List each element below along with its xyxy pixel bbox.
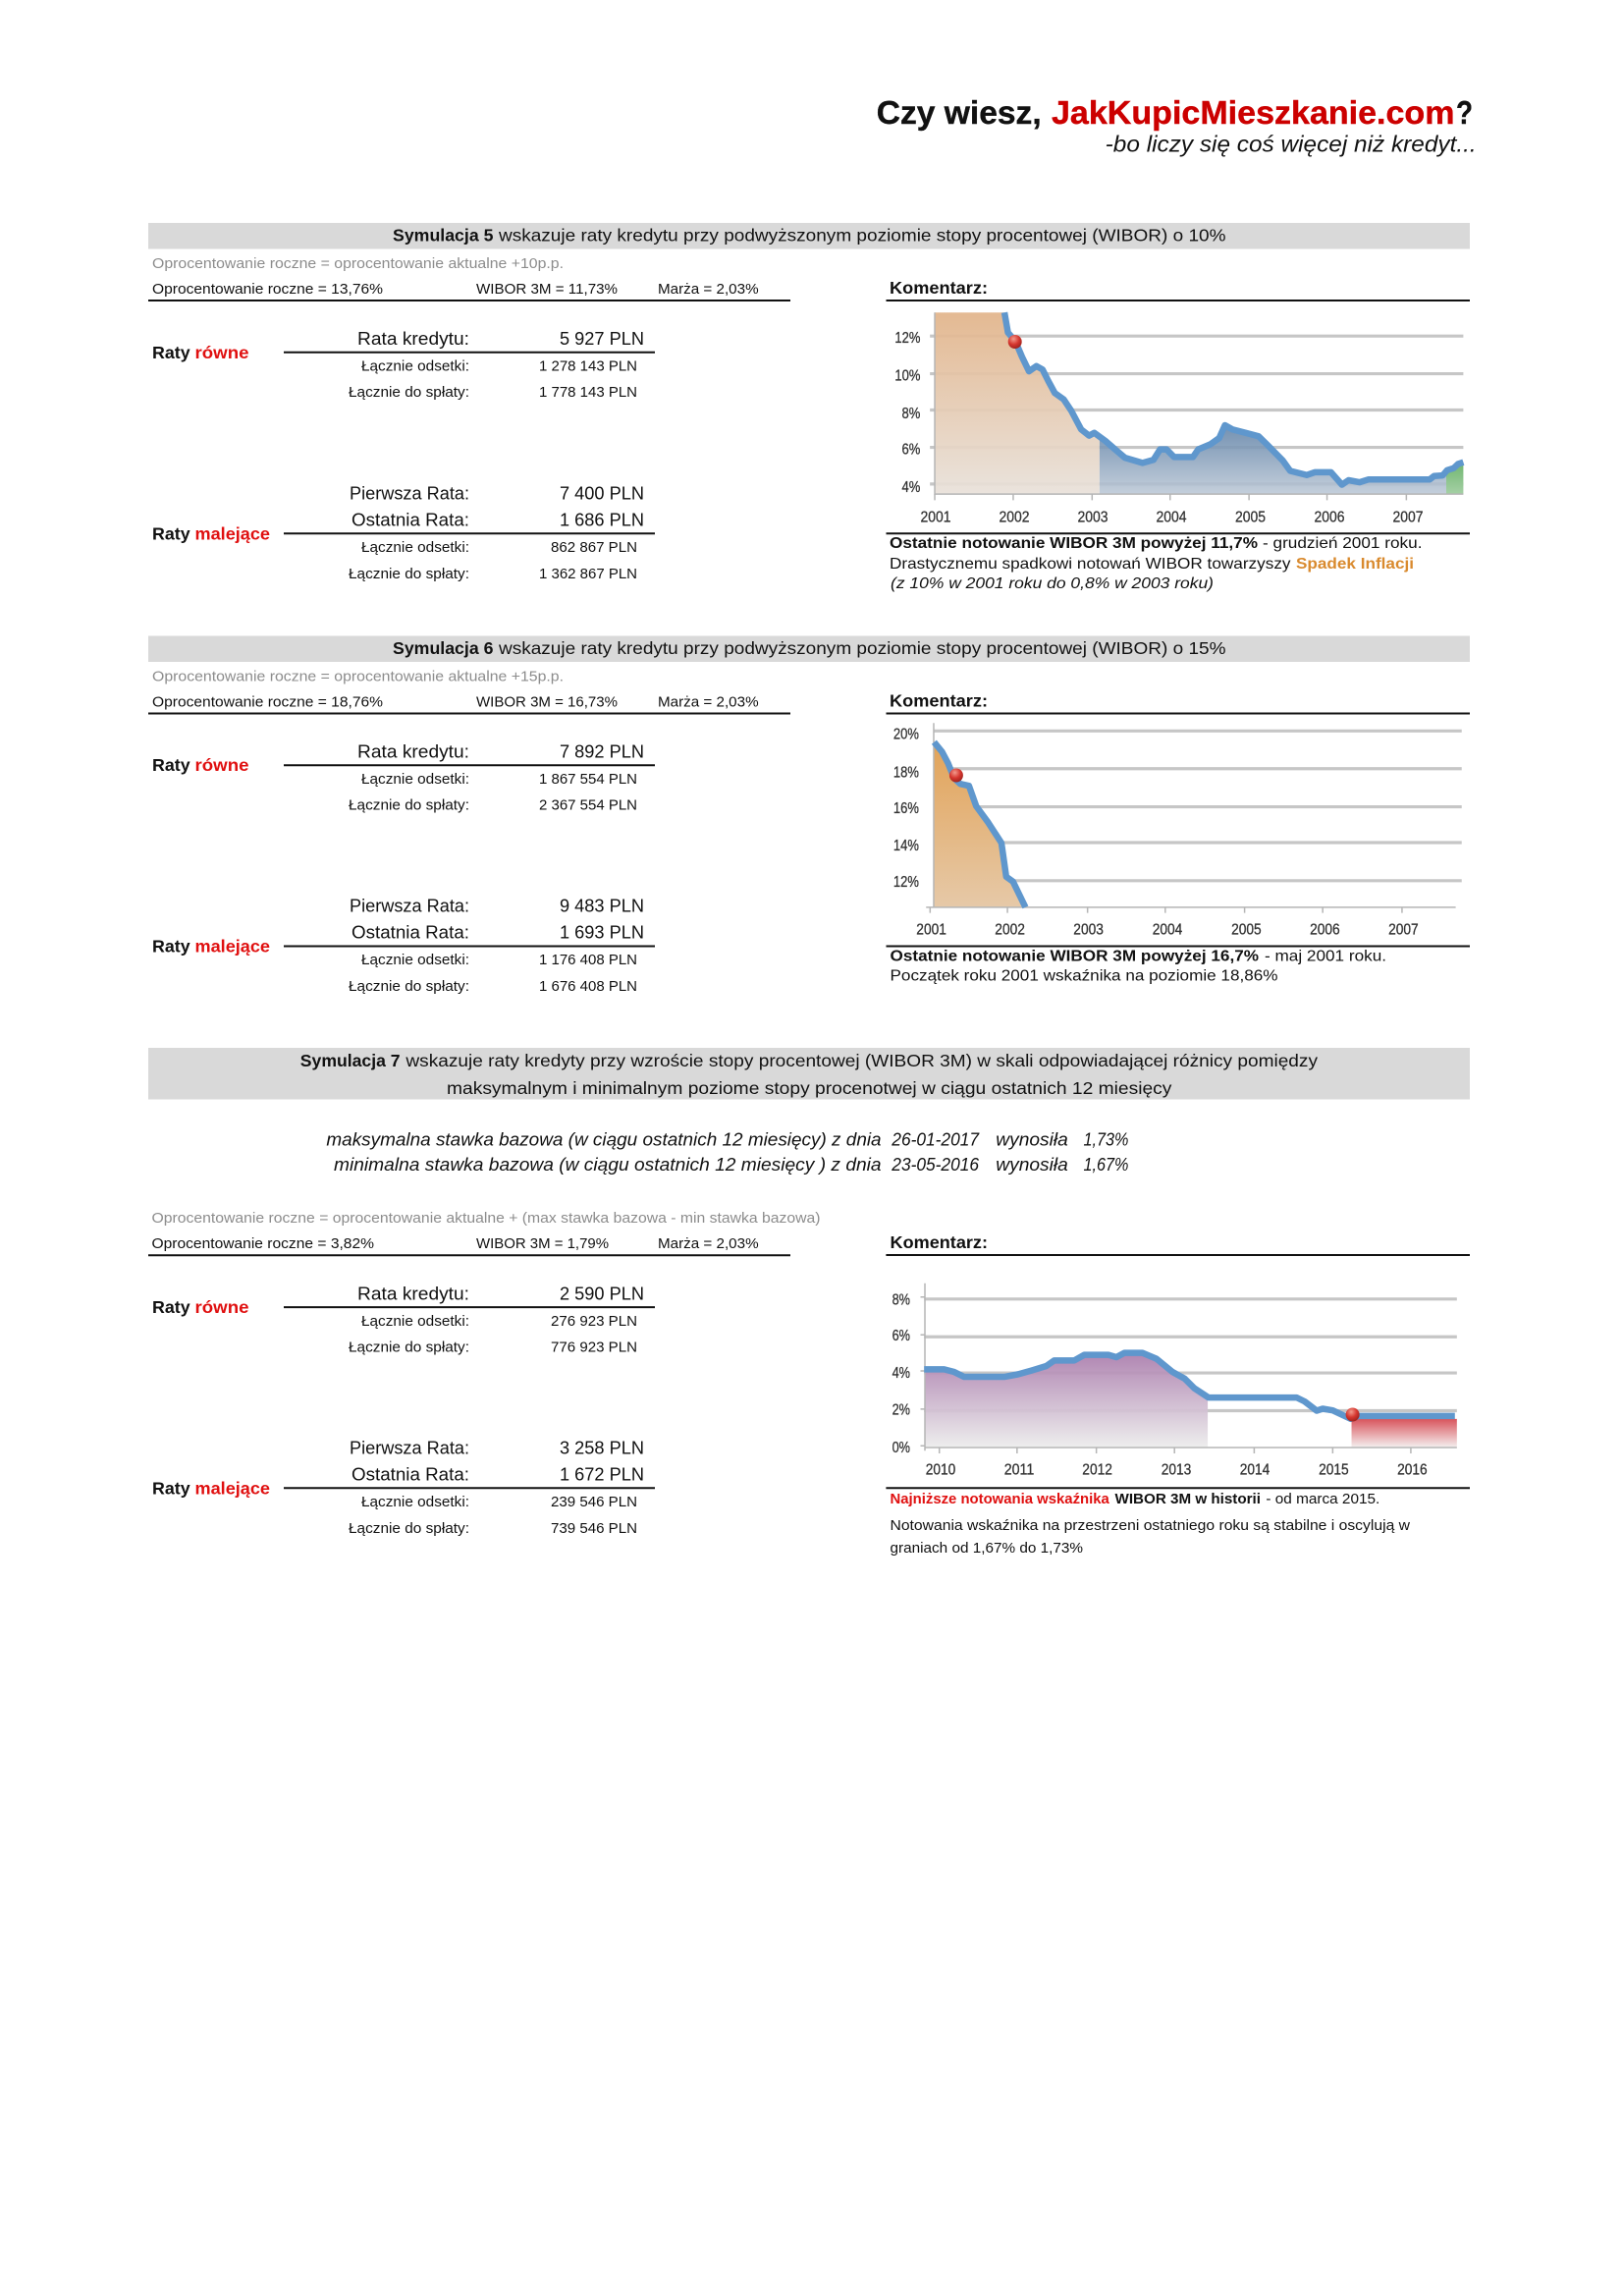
line chart: WIBOR 2001-2007: 12% bbox=[894, 330, 920, 347]
decreasing installments block bbox=[152, 1438, 655, 1537]
equal installments block: 1 867 554 PLN bbox=[539, 771, 637, 788]
decreasing installments block: 739 546 PLN bbox=[551, 1520, 637, 1537]
comment heading: Komentarz: bbox=[890, 278, 988, 298]
title: ? bbox=[1456, 95, 1473, 132]
decreasing installments block: 1 672 PLN bbox=[560, 1464, 644, 1485]
decreasing installments block: 239 546 PLN bbox=[551, 1494, 637, 1510]
chart caption: Początek roku 2001 wskaźnika na poziomie 18,86% bbox=[890, 968, 1278, 985]
base rate notes: wynosiła bbox=[996, 1155, 1068, 1175]
chart caption bbox=[886, 947, 1470, 985]
equal installments block bbox=[152, 328, 655, 401]
interest rate formula: Oprocentowanie roczne = oprocentowanie aktualne +15p.p. bbox=[152, 668, 564, 684]
line chart: WIBOR 2010-2016: 0% bbox=[892, 1440, 910, 1456]
line chart: WIBOR 2001-2007: 6% bbox=[901, 442, 920, 459]
line chart: WIBOR 2001 drop: 16% bbox=[893, 800, 919, 817]
chart caption: Spadek Inflacji bbox=[1296, 556, 1414, 573]
decreasing installments block: 1 176 408 PLN bbox=[539, 952, 637, 968]
interest rate formula: WIBOR 3M = 11,73% bbox=[476, 281, 618, 298]
line chart: WIBOR 2010-2016 bbox=[892, 1284, 1457, 1478]
interest rate formula: WIBOR 3M = 16,73% bbox=[476, 693, 618, 710]
heading: simulation 7: wskazuje raty kredyty przy wzroście stopy procentowej (WIBOR 3M) w skali odpowiadającej różnicy pomiędzy bbox=[405, 1051, 1318, 1070]
line chart: WIBOR 2001 drop: 2007 bbox=[1388, 922, 1419, 939]
interest rate formula bbox=[148, 255, 790, 301]
line chart: WIBOR 2001-2007: 8% bbox=[901, 406, 920, 422]
line chart: WIBOR 2001-2007: 2006 bbox=[1314, 509, 1345, 525]
equal installments block: Łącznie odsetki: bbox=[361, 771, 469, 788]
line chart: WIBOR 2010-2016: 6% bbox=[892, 1328, 910, 1344]
line chart: WIBOR 2001 drop: 2002 bbox=[995, 922, 1025, 939]
page header bbox=[877, 95, 1477, 157]
comment heading: Komentarz: bbox=[890, 691, 988, 711]
equal installments block: równe bbox=[194, 755, 249, 775]
interest rate formula: Marża = 2,03% bbox=[658, 281, 759, 298]
line chart: WIBOR 2010-2016: 8% bbox=[892, 1291, 910, 1308]
subtitle: -bo liczy się coś więcej niż kredyt... bbox=[1106, 132, 1477, 157]
interest rate formula: Oprocentowanie roczne = 13,76% bbox=[152, 281, 383, 298]
line chart: WIBOR 2001-2007 bbox=[894, 312, 1463, 525]
decreasing installments block: Łącznie do spłaty: bbox=[349, 566, 469, 582]
decreasing installments block: 9 483 PLN bbox=[560, 896, 644, 916]
equal installments block: Łącznie do spłaty: bbox=[349, 1339, 469, 1356]
decreasing installments block: Pierwsza Rata: bbox=[350, 1438, 469, 1458]
equal installments block: 1 778 143 PLN bbox=[539, 384, 637, 401]
chart caption: Ostatnie notowanie WIBOR 3M powyżej 11,7% bbox=[890, 535, 1258, 552]
equal installments block: 776 923 PLN bbox=[551, 1339, 637, 1356]
heading: simulation 6: wskazuje raty kredytu przy podwyższonym poziomie stopy procentowej (WIBOR) o 15% bbox=[498, 638, 1226, 658]
equal installments block: równe bbox=[194, 1297, 249, 1317]
chart caption bbox=[886, 1488, 1470, 1557]
line chart: WIBOR 2001 drop: 18% bbox=[893, 765, 919, 782]
line chart: WIBOR 2001 drop: 2006 bbox=[1310, 922, 1340, 939]
interest rate formula: Oprocentowanie roczne = oprocentowanie aktualne + (max stawka bazowa - min stawka bazowa) bbox=[151, 1210, 821, 1227]
decreasing installments block: Łącznie odsetki: bbox=[361, 1494, 469, 1510]
equal installments block: 276 923 PLN bbox=[551, 1313, 637, 1330]
heading: simulation 7 bbox=[148, 1048, 1470, 1100]
decreasing installments block bbox=[152, 483, 655, 582]
equal installments block bbox=[152, 741, 655, 814]
equal installments block: 5 927 PLN bbox=[560, 328, 644, 349]
title: Czy wiesz, bbox=[877, 95, 1042, 132]
decreasing installments block: Raty bbox=[152, 1478, 190, 1498]
equal installments block: równe bbox=[194, 343, 249, 362]
decreasing installments block: Raty bbox=[152, 936, 190, 956]
base rate notes bbox=[326, 1129, 1128, 1175]
line chart: WIBOR 2001 drop: 20% bbox=[893, 726, 919, 742]
equal installments block: Rata kredytu: bbox=[357, 1284, 469, 1304]
decreasing installments block: 7 400 PLN bbox=[560, 483, 644, 504]
equal installments block: Raty bbox=[152, 343, 190, 362]
line chart: WIBOR 2001-2007: 2005 bbox=[1235, 509, 1266, 525]
line chart: WIBOR 2010-2016: 2013 bbox=[1162, 1461, 1191, 1478]
line chart: WIBOR 2001-2007: 2001 bbox=[921, 509, 951, 525]
interest rate formula: Oprocentowanie roczne = 3,82% bbox=[151, 1235, 374, 1252]
equal installments block bbox=[152, 1284, 655, 1356]
equal installments block: Rata kredytu: bbox=[357, 741, 469, 762]
decreasing installments block: Ostatnia Rata: bbox=[351, 922, 469, 943]
base rate notes: 1,67% bbox=[1084, 1155, 1128, 1175]
decreasing installments block: 1 693 PLN bbox=[560, 922, 644, 943]
line chart: WIBOR 2001 drop: 2004 bbox=[1153, 922, 1182, 939]
chart caption bbox=[886, 533, 1470, 592]
chart caption: Notowania wskaźnika na przestrzeni ostatniego roku są stabilne i oscylują w bbox=[890, 1517, 1410, 1534]
equal installments block: 1 278 143 PLN bbox=[539, 358, 637, 375]
interest rate formula bbox=[148, 1210, 821, 1255]
line chart: WIBOR 2001 drop: 2005 bbox=[1231, 922, 1262, 939]
line chart: WIBOR 2001-2007: 2003 bbox=[1078, 509, 1108, 525]
comment heading: Komentarz: bbox=[890, 1232, 988, 1252]
heading: simulation 6: Symulacja 6 bbox=[393, 638, 494, 658]
decreasing installments block: malejące bbox=[194, 1478, 270, 1498]
line chart: WIBOR 2010-2016: 2011 bbox=[1004, 1461, 1034, 1478]
decreasing installments block: Ostatnia Rata: bbox=[351, 1464, 469, 1485]
line chart: WIBOR 2001-2007: 2002 bbox=[1000, 509, 1030, 525]
decreasing installments block: Ostatnia Rata: bbox=[351, 510, 469, 530]
equal installments block: 7 892 PLN bbox=[560, 741, 644, 762]
decreasing installments block: 3 258 PLN bbox=[560, 1438, 644, 1458]
line chart: WIBOR 2001-2007: 2007 bbox=[1392, 509, 1424, 525]
base rate notes: minimalna stawka bazowa (w ciągu ostatnich 12 miesięcy ) z dnia bbox=[334, 1155, 882, 1175]
line chart: WIBOR 2010-2016: 2014 bbox=[1240, 1461, 1270, 1478]
line chart: WIBOR 2001-2007: 2004 bbox=[1157, 509, 1187, 525]
interest rate formula: Marża = 2,03% bbox=[658, 693, 759, 710]
equal installments block: Łącznie do spłaty: bbox=[349, 384, 469, 401]
line chart: WIBOR 2001 drop: 12% bbox=[893, 874, 919, 891]
equal installments block: 2 590 PLN bbox=[560, 1284, 644, 1304]
base rate notes: wynosiła bbox=[996, 1129, 1068, 1149]
chart caption: Drastycznemu spadkowi notowań WIBOR towarzyszy bbox=[890, 556, 1290, 573]
line chart: WIBOR 2010-2016: 2016 bbox=[1397, 1461, 1428, 1478]
decreasing installments block: Łącznie do spłaty: bbox=[349, 978, 469, 995]
line chart: WIBOR 2001-2007: 4% bbox=[901, 479, 920, 496]
heading: simulation 7: maksymalnym i minimalnym poziome stopy procenotwej w ciągu ostatnich 12 miesięcy bbox=[447, 1078, 1172, 1098]
chart caption: Ostatnie notowanie WIBOR 3M powyżej 16,7% bbox=[890, 948, 1259, 964]
equal installments block: Raty bbox=[152, 1297, 190, 1317]
base rate notes: maksymalna stawka bazowa (w ciągu ostatnich 12 miesięcy) z dnia bbox=[326, 1129, 882, 1149]
heading: simulation 5: wskazuje raty kredytu przy podwyższonym poziomie stopy procentowej (WIBOR) o 10% bbox=[498, 226, 1226, 246]
decreasing installments block: Łącznie odsetki: bbox=[361, 539, 469, 556]
interest rate formula: WIBOR 3M = 1,79% bbox=[476, 1235, 609, 1252]
heading: simulation 7: Symulacja 7 bbox=[300, 1051, 401, 1070]
heading: simulation 6 bbox=[148, 636, 1470, 662]
base rate notes: 26-01-2017 bbox=[891, 1129, 980, 1149]
decreasing installments block: 862 867 PLN bbox=[551, 539, 637, 556]
decreasing installments block: Pierwsza Rata: bbox=[350, 896, 469, 916]
line chart: WIBOR 2001 drop bbox=[893, 723, 1462, 939]
decreasing installments block bbox=[152, 896, 655, 995]
chart caption: - grudzień 2001 roku. bbox=[1263, 535, 1422, 552]
equal installments block: 2 367 554 PLN bbox=[539, 797, 637, 814]
chart caption: (z 10% w 2001 roku do 0,8% w 2003 roku) bbox=[891, 575, 1214, 592]
title: JakKupicMieszkanie.com bbox=[1052, 95, 1455, 132]
line chart: WIBOR 2010-2016: 2012 bbox=[1082, 1461, 1112, 1478]
decreasing installments block: 1 362 867 PLN bbox=[539, 566, 637, 582]
base rate notes: 1,73% bbox=[1084, 1129, 1128, 1149]
decreasing installments block: 1 686 PLN bbox=[560, 510, 644, 530]
chart caption: - maj 2001 roku. bbox=[1265, 948, 1386, 964]
base rate notes: 23-05-2016 bbox=[891, 1155, 980, 1175]
line chart: WIBOR 2010-2016: 2010 bbox=[926, 1461, 955, 1478]
decreasing installments block: malejące bbox=[194, 523, 270, 543]
decreasing installments block: Pierwsza Rata: bbox=[350, 483, 469, 504]
interest rate formula: Oprocentowanie roczne = 18,76% bbox=[152, 693, 383, 710]
line chart: WIBOR 2010-2016: 4% bbox=[892, 1365, 910, 1382]
line chart: WIBOR 2001 drop: 2003 bbox=[1073, 922, 1104, 939]
equal installments block: Rata kredytu: bbox=[357, 328, 469, 349]
interest rate formula: Marża = 2,03% bbox=[658, 1235, 759, 1252]
panel: simulation 7 bbox=[148, 1048, 1470, 1557]
line chart: WIBOR 2001 drop: 2001 bbox=[916, 922, 946, 939]
line chart: WIBOR 2010-2016: 2015 bbox=[1319, 1461, 1349, 1478]
panel: simulation 5 bbox=[148, 223, 1470, 592]
heading: simulation 5 bbox=[148, 223, 1470, 249]
equal installments block: Łącznie odsetki: bbox=[361, 358, 469, 375]
chart caption: WIBOR 3M w historii bbox=[1115, 1491, 1261, 1507]
panel: simulation 6 bbox=[148, 636, 1470, 995]
line chart: WIBOR 2001-2007: 10% bbox=[894, 368, 920, 385]
decreasing installments block: Łącznie odsetki: bbox=[361, 952, 469, 968]
decreasing installments block: malejące bbox=[194, 936, 270, 956]
title bbox=[877, 95, 1473, 132]
equal installments block: Raty bbox=[152, 755, 190, 775]
equal installments block: Łącznie odsetki: bbox=[361, 1313, 469, 1330]
interest rate formula bbox=[148, 668, 790, 713]
chart caption: - od marca 2015. bbox=[1266, 1491, 1379, 1507]
heading: simulation 5: Symulacja 5 bbox=[393, 226, 494, 246]
chart caption: graniach od 1,67% do 1,73% bbox=[890, 1540, 1083, 1557]
chart caption: Najniższe notowania wskaźnika bbox=[890, 1491, 1109, 1507]
line chart: WIBOR 2010-2016: 2% bbox=[892, 1401, 910, 1418]
decreasing installments block: 1 676 408 PLN bbox=[539, 978, 637, 995]
interest rate formula: Oprocentowanie roczne = oprocentowanie aktualne +10p.p. bbox=[152, 255, 564, 272]
decreasing installments block: Łącznie do spłaty: bbox=[349, 1520, 469, 1537]
equal installments block: Łącznie do spłaty: bbox=[349, 797, 469, 814]
decreasing installments block: Raty bbox=[152, 523, 190, 543]
line chart: WIBOR 2001 drop: 14% bbox=[893, 838, 919, 854]
